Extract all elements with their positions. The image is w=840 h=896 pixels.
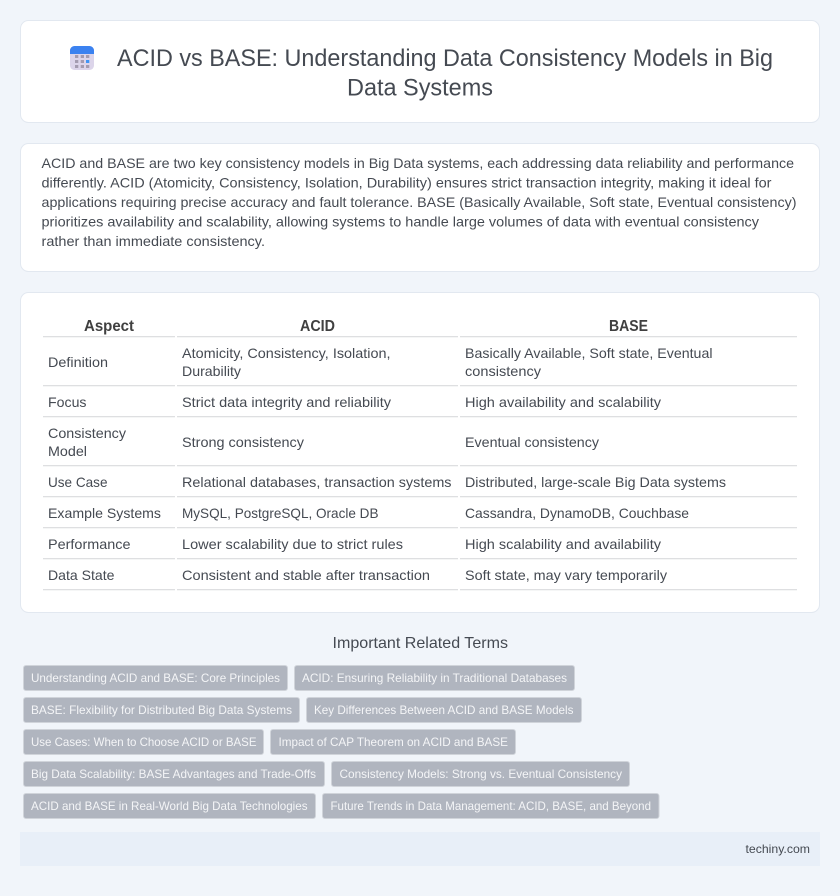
tag: Consistency Models: Strong vs. Eventual Consistency — [340, 767, 622, 781]
intro paragraph: prioritizes availability and scalability, allowing systems to handle large volumes of data with eventual consistency — [42, 214, 759, 230]
panel: title header — [20, 20, 820, 122]
tag: Key Differences Between ACID and BASE Models — [314, 703, 574, 717]
tag: BASE: Flexibility for Distributed Big Data Systems — [31, 703, 292, 717]
row: consistency model: Model — [48, 443, 87, 459]
intro paragraph: rather than immediate consistency. — [42, 233, 265, 249]
tag — [322, 794, 659, 818]
row: data state: Consistent and stable after transaction — [182, 567, 430, 583]
panel: comparison table — [20, 292, 820, 612]
row: performance — [43, 536, 797, 559]
tag: ACID: Ensuring Reliability in Traditional Databases — [302, 671, 567, 685]
row: performance: Performance — [48, 536, 131, 552]
tag: Impact of CAP Theorem on ACID and BASE — [278, 735, 508, 749]
title: ACID vs BASE: Understanding Data Consistency Models in Big — [117, 45, 773, 72]
tag: Big Data Scalability: BASE Advantages and Trade-Offs — [31, 767, 316, 781]
title: Data Systems — [347, 74, 493, 102]
row: data state: Data State — [48, 567, 115, 583]
tag: Use Cases: When to Choose ACID or BASE — [31, 735, 256, 749]
row: focus — [43, 394, 797, 417]
row: consistency model: Consistency — [48, 425, 126, 441]
row: definition — [43, 345, 797, 386]
row: definition: Basically Available, Soft state, Eventual — [465, 345, 712, 361]
row: definition: Durability — [182, 363, 241, 379]
row: focus: Strict data integrity and reliability — [182, 394, 391, 410]
row: example systems: MySQL, PostgreSQL, Oracle DB — [182, 505, 378, 521]
row: data state: Soft state, may vary temporarily — [465, 567, 667, 583]
table header — [43, 318, 797, 337]
intro paragraph: differently. ACID (Atomicity, Consistency, Isolation, Durability) ensures strict transaction integrity, making it ideal for — [42, 174, 772, 190]
row: definition: consistency — [465, 363, 541, 379]
row: use case: Relational databases, transaction systems — [182, 474, 452, 490]
tag: ACID and BASE in Real-World Big Data Technologies — [31, 799, 308, 813]
row: consistency model: Eventual consistency — [465, 434, 599, 450]
row: focus: Focus — [48, 394, 86, 410]
heading: important related terms: Important Related Terms — [332, 635, 508, 652]
table header: BASE — [609, 318, 648, 335]
row: use case — [43, 474, 797, 497]
intro paragraph: ACID and BASE are two key consistency models in Big Data systems, each addressing data reliability and performance — [42, 155, 794, 171]
row: performance: High scalability and availability — [465, 536, 661, 552]
tag — [24, 762, 324, 786]
intro paragraph: applications requiring precise accuracy and fault tolerance. BASE (Basically Available, Soft state, Eventual consistency) — [42, 194, 796, 210]
row: definition: Atomicity, Consistency, Isolation, — [182, 345, 390, 361]
tag — [306, 698, 582, 722]
intro paragraph — [42, 155, 796, 249]
tag — [332, 762, 630, 786]
row: example systems: Cassandra, DynamoDB, Couchbase — [465, 505, 689, 521]
table header: ACID — [300, 318, 335, 335]
row: definition: Definition — [48, 354, 108, 370]
tag — [270, 730, 516, 754]
tag: Understanding ACID and BASE: Core Principles — [31, 671, 280, 685]
tag — [24, 730, 264, 754]
panel: related term tags — [24, 666, 659, 818]
row: example systems: Example Systems — [48, 505, 161, 521]
tag — [24, 698, 300, 722]
row: example systems — [43, 505, 797, 528]
row: performance: Lower scalability due to strict rules — [182, 536, 403, 552]
panel: introduction — [20, 144, 820, 272]
title — [117, 45, 773, 102]
tag — [24, 794, 316, 818]
footer source: techiny.com — [746, 842, 810, 856]
tag: Future Trends in Data Management: ACID, BASE, and Beyond — [330, 799, 651, 813]
row: focus: High availability and scalability — [465, 394, 661, 410]
tag — [24, 666, 288, 690]
row: consistency model — [43, 425, 797, 466]
row: use case: Use Case — [48, 474, 108, 490]
icon: calendar grid — [70, 46, 94, 70]
row: consistency model: Strong consistency — [182, 434, 304, 450]
footer band — [20, 832, 820, 866]
row: data state — [43, 567, 797, 590]
row: use case: Distributed, large-scale Big Data systems — [465, 474, 726, 490]
tag — [294, 666, 574, 690]
table header: Aspect — [84, 318, 135, 335]
